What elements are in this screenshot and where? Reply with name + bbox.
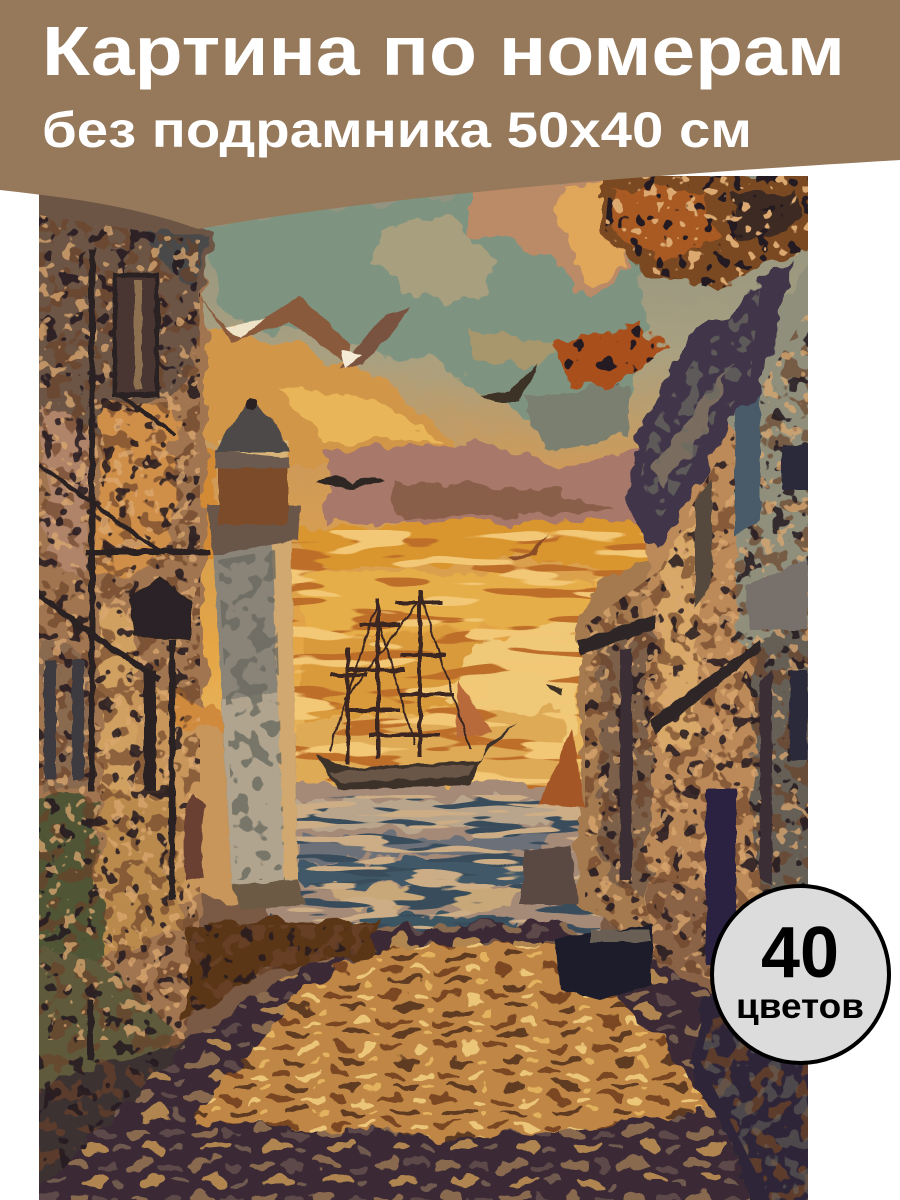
ship xyxy=(316,590,517,790)
left building details xyxy=(39,250,210,1060)
right building details xyxy=(538,385,808,965)
badge: 40 colours xyxy=(712,886,889,1063)
header banner xyxy=(0,0,900,229)
cobblestone street xyxy=(20,920,830,1200)
trunk mottling xyxy=(640,290,760,520)
sea ripples xyxy=(270,795,600,945)
tree trunk xyxy=(628,260,790,550)
tree foliage xyxy=(555,170,820,390)
painting base xyxy=(176,882,659,1046)
badge number: 40 xyxy=(761,913,839,993)
lighthouse xyxy=(207,398,305,910)
barrel and figure xyxy=(520,845,652,1000)
painting xyxy=(20,160,830,1200)
birds xyxy=(196,293,562,694)
sky xyxy=(200,176,808,790)
subtitle: без подрамника 50х40 см xyxy=(42,102,752,158)
left buildings xyxy=(39,194,238,1188)
title: Картина по номерам xyxy=(42,12,845,90)
left wall mottling xyxy=(39,215,200,1200)
right wall mottling xyxy=(585,310,808,1010)
sea xyxy=(270,785,600,955)
street mottling xyxy=(190,925,808,1200)
sky streaks xyxy=(270,530,660,790)
foliage mottling xyxy=(555,176,808,390)
right buildings xyxy=(572,266,808,994)
lighthouse mottling xyxy=(218,550,285,880)
badge label: цветов xyxy=(736,987,864,1026)
